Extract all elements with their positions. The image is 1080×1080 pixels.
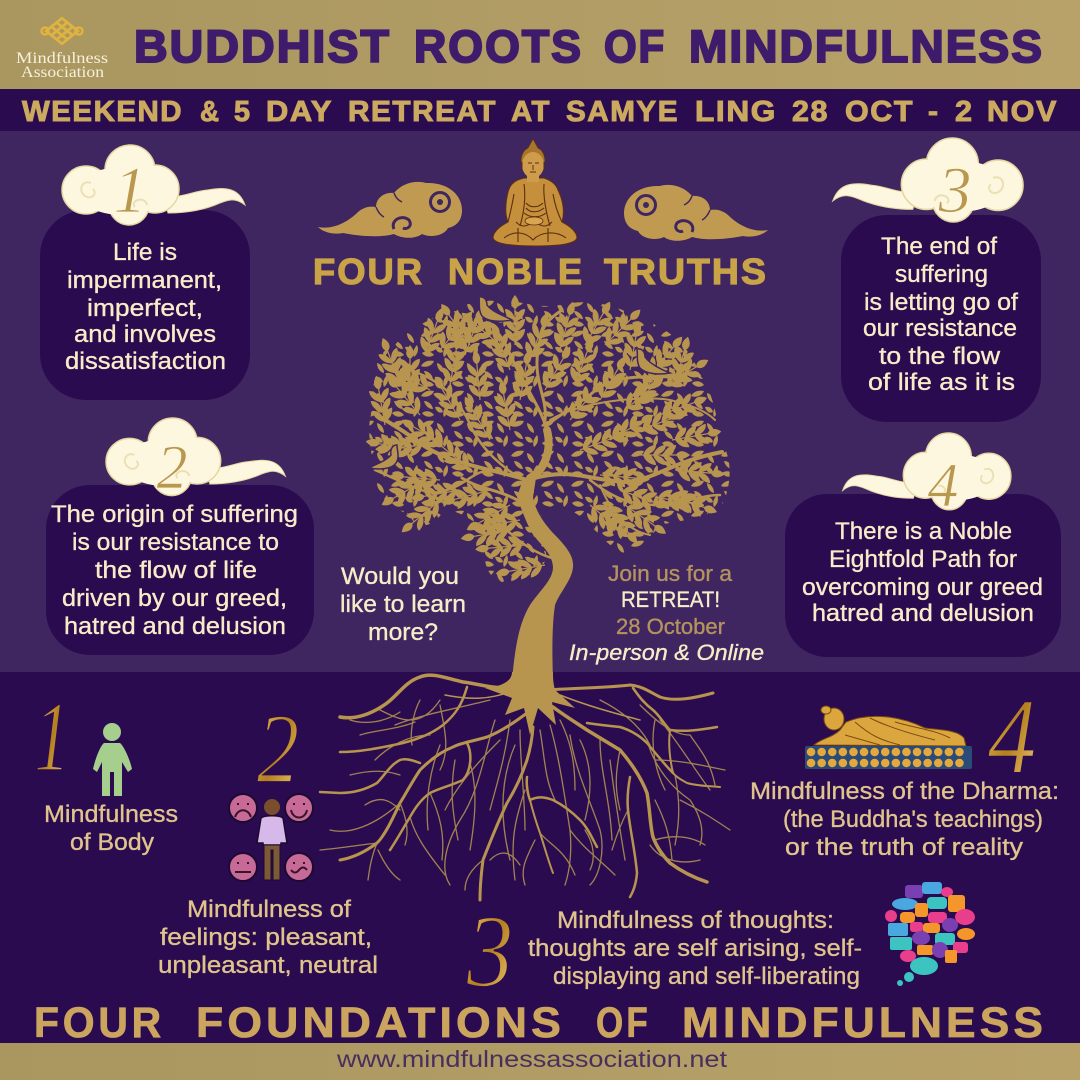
text: mindfulness of feelings: feelings: pleasant, [160, 924, 372, 951]
text: truth 4: There is a Noble [835, 518, 1012, 545]
text: truth 2: the flow of life [95, 557, 257, 584]
retreat subtitle: WEEKEND [22, 96, 183, 128]
panel: truth 1 [40, 145, 250, 400]
tree crown, branches and trunk [364, 295, 730, 680]
text: truth 3: of life as it is [868, 369, 1015, 396]
text: truth 1: imperfect, [87, 295, 203, 322]
text: mindfulness of thoughts: displaying and self-liberating [553, 963, 860, 990]
icon: gold cloud left [318, 182, 462, 238]
title: BUDDHIST [134, 21, 391, 72]
text: truth 4: hatred and delusion [812, 600, 1034, 627]
heading: four foundations of mindfulness: FOUNDATIONS [196, 999, 565, 1047]
retreat subtitle: OCT [845, 96, 914, 128]
footer website: www.mindfulnessassociation.net [336, 1046, 728, 1072]
text: truth 2: hatred and delusion [64, 613, 286, 640]
retreat subtitle: 28 [792, 96, 829, 128]
text: truth 4: Eightfold Path for [829, 546, 1017, 573]
retreat subtitle: 5 [234, 96, 250, 128]
retreat subtitle: LING [695, 96, 777, 128]
text: truth 3: suffering [895, 261, 988, 288]
lower dark panel [0, 672, 1080, 1044]
retreat subtitle: RETREAT [348, 96, 497, 128]
text: truth 4 [802, 518, 1043, 627]
text: mindfulness of body [44, 801, 178, 856]
text: mindfulness of the dharma: Mindfulness of the Dharma: [750, 778, 1059, 805]
icon: green person [93, 723, 132, 796]
text: join us for a retreat: RETREAT! [621, 587, 720, 612]
top header band [0, 0, 1080, 89]
bird right [637, 349, 670, 374]
text: mindfulness of the dharma [750, 778, 1059, 861]
number 4: 4 [988, 677, 1036, 797]
text: would you like to learn more: Would you [341, 563, 459, 590]
text: truth 2 [51, 501, 298, 640]
text: truth 3: The end of [881, 233, 997, 260]
heading: four foundations of mindfulness: OF [596, 999, 651, 1047]
icon: speech bubble cluster [885, 882, 975, 986]
foundation 3: thoughts [466, 882, 975, 1009]
text: truth 3: to the flow [879, 343, 1001, 370]
heading: four noble truths: FOUR [313, 251, 424, 292]
cloud number 4: 4 [928, 452, 958, 520]
retreat subtitle: SAMYE [566, 96, 679, 128]
text: would you like to learn more [340, 563, 466, 646]
number 1: 1 [35, 681, 69, 792]
bird top [479, 297, 512, 321]
cloud number 3 [833, 138, 1023, 227]
text: mindfulness of thoughts: Mindfulness of thoughts: [557, 907, 834, 934]
text: mindfulness of the dharma: or the truth of reality [785, 834, 1023, 861]
number 3: 3 [466, 895, 513, 1009]
text: truth 3 [863, 233, 1018, 396]
text: mindfulness of feelings: Mindfulness of [187, 896, 351, 923]
heading: four noble truths [313, 251, 768, 292]
footer band [0, 1043, 1080, 1080]
foundation 4: dharma [750, 677, 1059, 861]
cloud number 2 [106, 418, 285, 502]
leaf sprays [364, 295, 726, 584]
cloud number 1 [62, 145, 245, 227]
trunk [512, 478, 573, 680]
bird left [369, 445, 398, 469]
icon: person with emotion faces [229, 794, 313, 881]
text: truth 2: is our resistance to [72, 529, 279, 556]
panel: truth 2 [46, 418, 314, 655]
heading: four foundations of mindfulness [34, 999, 1047, 1047]
logo: Mindfulness Association [16, 18, 108, 81]
text: truth 1: impermanent, [67, 267, 222, 294]
heading: four foundations of mindfulness: FOUR [34, 999, 165, 1047]
icon: reclining Buddha [805, 706, 972, 769]
text: mindfulness of thoughts: thoughts are self arising, self- [528, 935, 862, 962]
text: mindfulness of body: Mindfulness [44, 801, 178, 828]
retreat subtitle [22, 96, 1058, 128]
leaf texture under crown [369, 299, 730, 582]
text: join us for a retreat: In-person & Online [569, 640, 764, 665]
retreat subtitle: - [928, 96, 938, 128]
text: join us for a retreat: 28 October [616, 614, 725, 639]
text: would you like to learn more: more? [368, 619, 438, 646]
retreat subtitle: DAY [266, 96, 333, 128]
branches [373, 310, 722, 558]
panel: truth 4 [785, 433, 1061, 657]
title: ROOTS [414, 21, 583, 72]
cloud number 1: 1 [114, 154, 146, 227]
text: truth 2: driven by our greed, [62, 585, 287, 612]
text: truth 1: dissatisfaction [65, 348, 226, 375]
panel: truth 3 [833, 138, 1041, 422]
title: OF [604, 21, 666, 72]
root flare [485, 672, 575, 735]
text: join us for a retreat [569, 561, 764, 665]
logo: Mindfulness Association: Association [21, 64, 104, 81]
icon: gold cloud right [624, 185, 768, 241]
retreat subtitle: 2 [955, 96, 972, 128]
text: mindfulness of thoughts [528, 907, 862, 990]
title [134, 21, 1044, 72]
heading: four noble truths: TRUTHS [604, 251, 768, 292]
text: mindfulness of body: of Body [70, 829, 154, 856]
tree roots [320, 672, 730, 900]
text: mindfulness of feelings: unpleasant, neutral [158, 952, 378, 979]
number 2: 2 [257, 694, 299, 805]
text: join us for a retreat: Join us for a [608, 561, 733, 586]
text: truth 1: Life is [113, 239, 177, 266]
icon: seated Buddha [493, 139, 577, 246]
cloud number 3: 3 [938, 154, 972, 227]
heading: four foundations of mindfulness: MINDFULNESS [682, 999, 1047, 1047]
text: mindfulness of feelings [158, 896, 378, 979]
heading: four noble truths: NOBLE [448, 251, 584, 292]
text: truth 3: our resistance [863, 315, 1017, 342]
text: truth 1: and involves [74, 321, 216, 348]
retreat subtitle: NOV [987, 96, 1058, 128]
text: truth 2: The origin of suffering [51, 501, 298, 528]
text: truth 1 [65, 239, 226, 375]
retreat subtitle: AT [511, 96, 551, 128]
foundation 2: feelings [158, 694, 378, 979]
retreat subtitle: & [200, 96, 219, 128]
foundation 1: body [35, 681, 178, 856]
cloud number 4 [843, 433, 1011, 520]
text: would you like to learn more: like to learn [340, 591, 466, 618]
title: MINDFULNESS [689, 21, 1044, 72]
text: truth 3: is letting go of [864, 289, 1018, 316]
cloud number 2: 2 [156, 434, 188, 502]
logo: Mindfulness Association: Mindfulness [16, 50, 108, 67]
retreat banner band [0, 89, 1080, 131]
text: mindfulness of the dharma: (the Buddha's teachings) [783, 806, 1043, 833]
text: truth 4: overcoming our greed [802, 574, 1043, 601]
middle purple panel [0, 131, 1080, 672]
